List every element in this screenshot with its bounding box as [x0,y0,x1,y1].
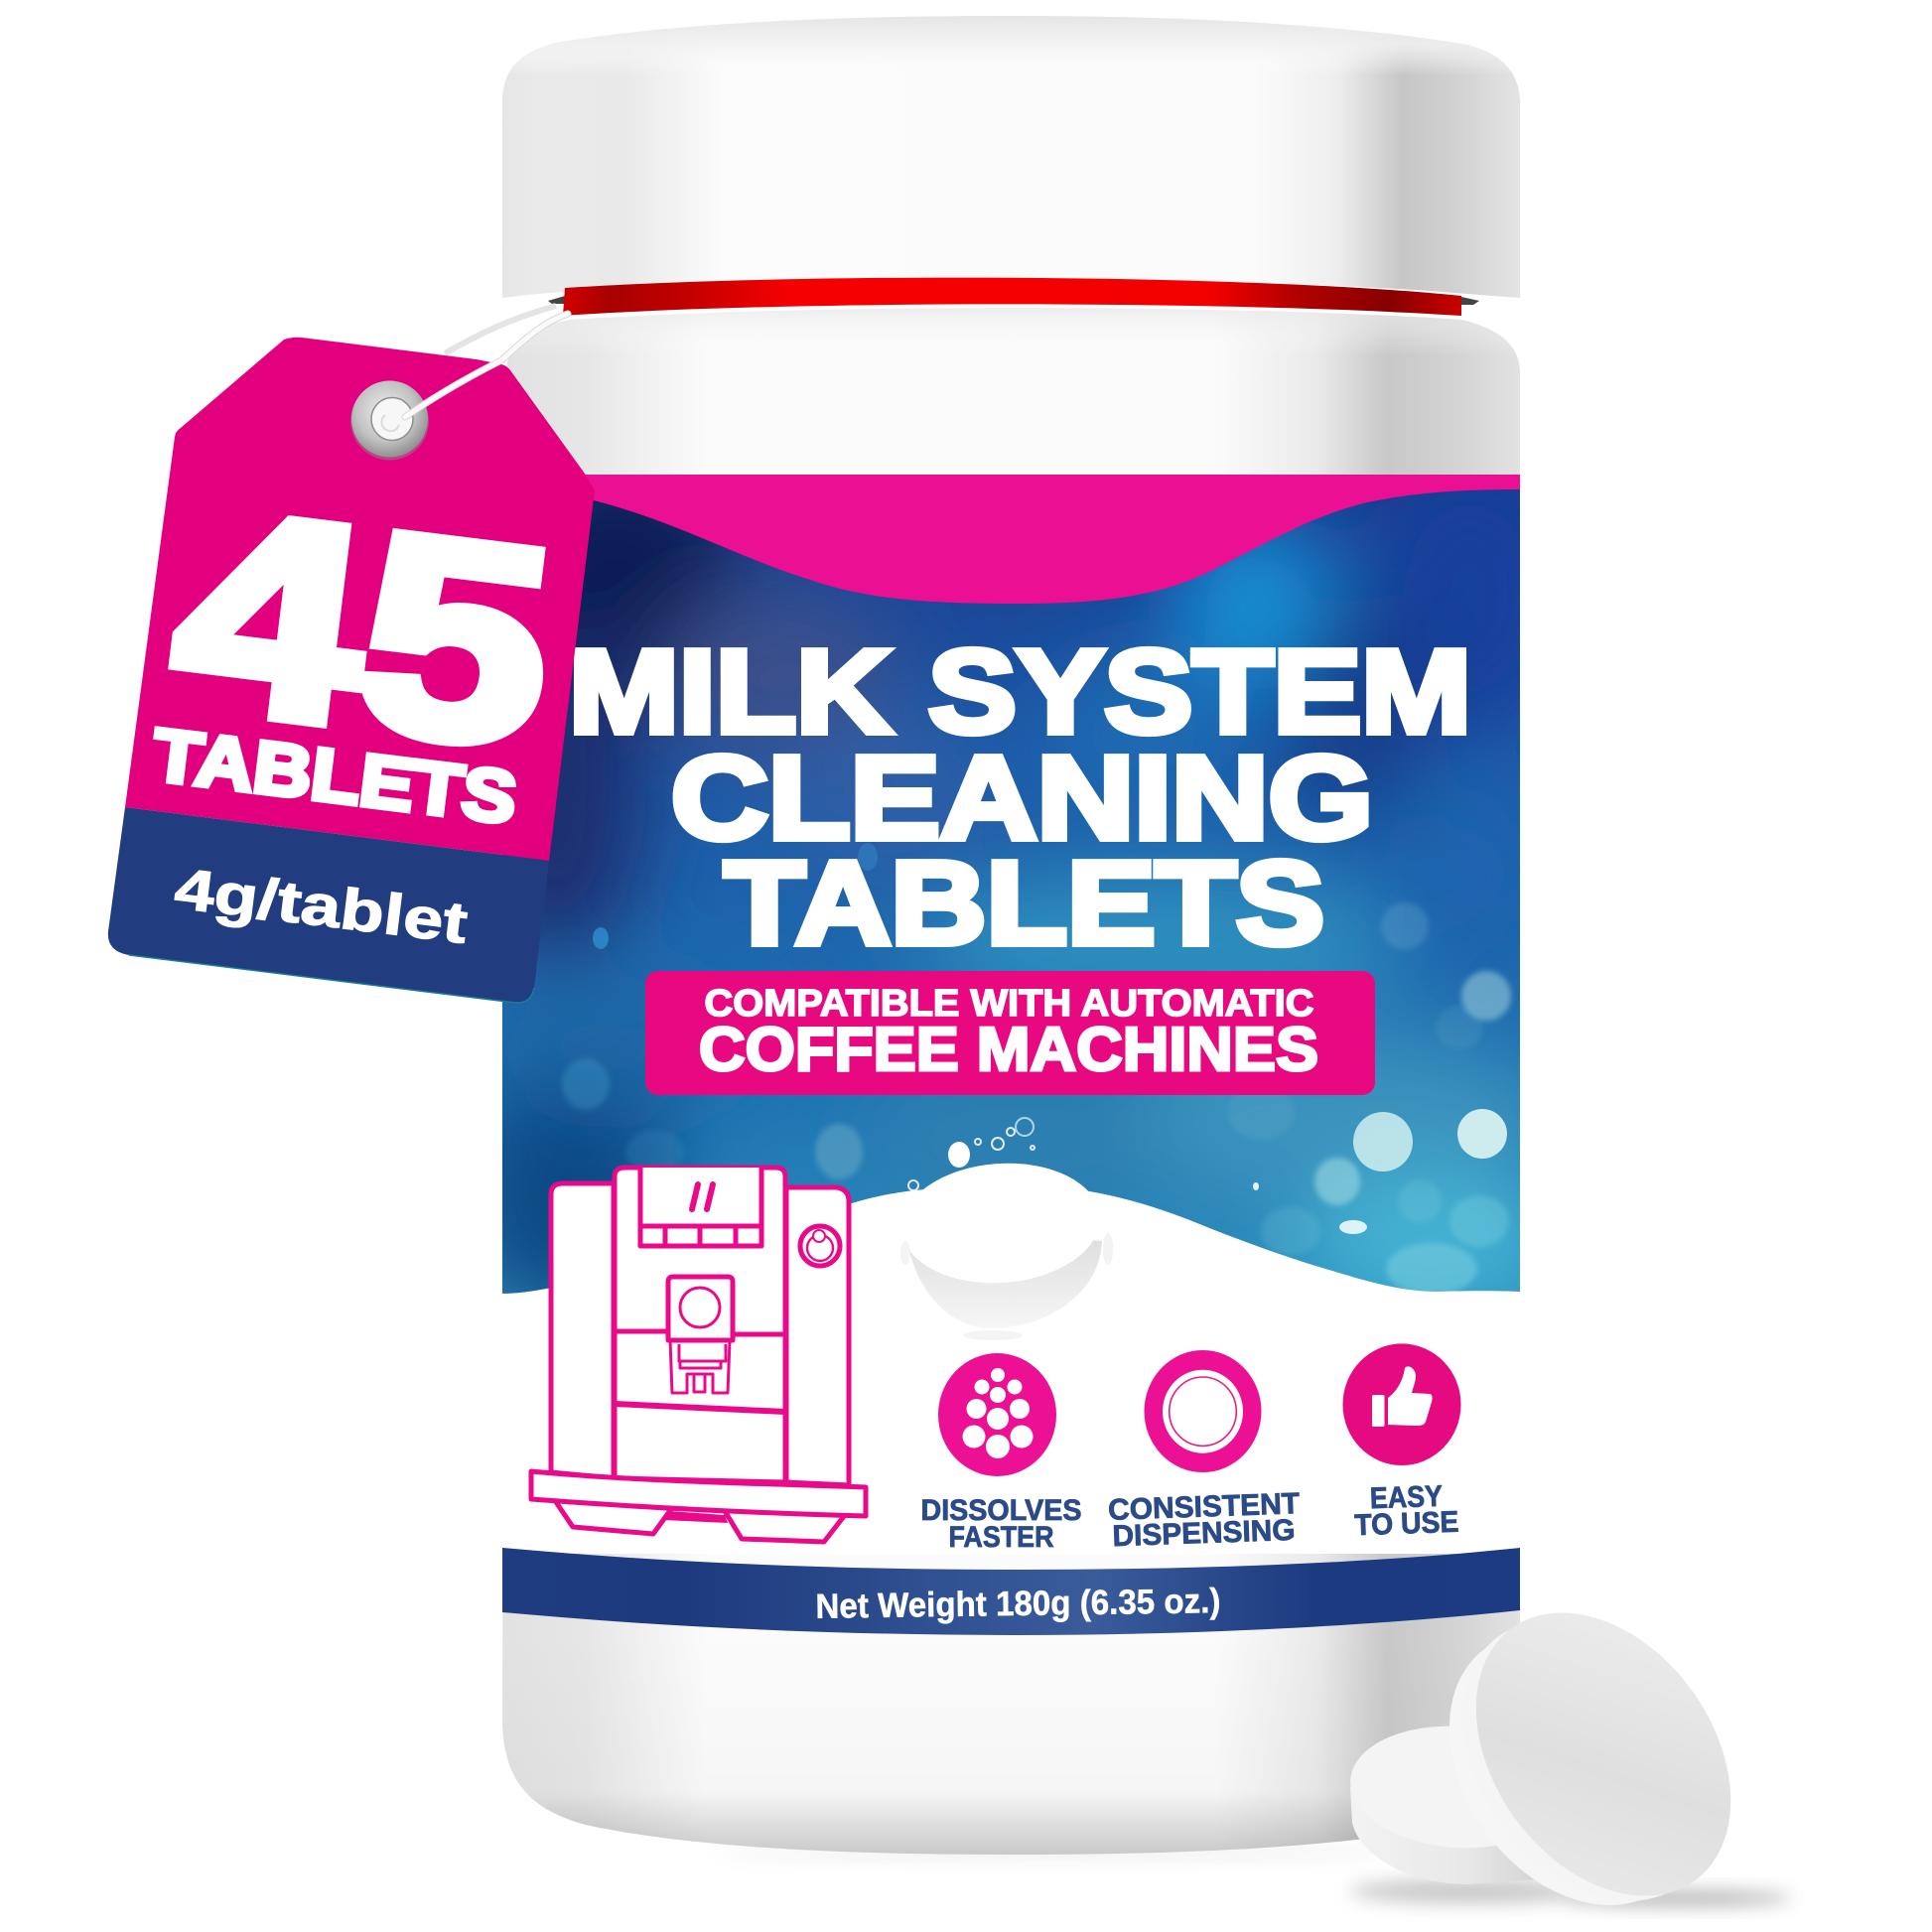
net weight text: Net Weight 180g (6.35 oz.) [815,1582,1221,1626]
benefit label: dissolves faster: FASTER [949,1521,1054,1554]
icon: easy to use thumbs up [1342,1343,1461,1465]
machine dispenser [614,1277,786,1393]
icon: dissolving tablet with bubbles [897,1118,1113,1340]
icon: coffee machine line drawing [531,1168,866,1542]
benefit label: dissolves faster [921,1494,1082,1554]
loose tablet: front tablet [1398,1564,1783,1932]
hang tag string back strand [445,306,556,353]
icon: dissolves faster [938,1353,1056,1476]
icon: consistent dispensing [1144,1350,1261,1472]
callout: compatible with automatic coffee machines: COMPATIBLE WITH AUTOMATIC [705,983,1314,1025]
loose tablets shadow [1350,1879,1792,1905]
jar ground shadow [715,1846,1390,1860]
hang tag [108,314,595,1003]
callout: compatible with automatic coffee machines: COFFEE MACHINES [699,1016,1318,1084]
machine drip tray [531,1471,866,1516]
benefit label: consistent dispensing [1108,1487,1302,1553]
machine feet [554,1499,845,1542]
tag number 45: 45 [160,450,567,806]
tag weight per tablet: 4g/tablet [172,856,471,956]
label white lower area [502,1184,1520,1554]
benefit label: consistent dispensing: DISPENSING [1112,1514,1296,1553]
jar lid [496,14,1529,298]
benefit label: consistent dispensing: CONSISTENT [1108,1487,1301,1527]
benefit label: easy to use [1353,1479,1459,1542]
neck shadow slits [548,296,1479,305]
bokeh spots [562,843,1511,1295]
tag navy footer [108,807,549,1003]
benefit label: dissolves faster: DISSOLVES [921,1494,1082,1527]
jar body [502,304,1525,1855]
benefit label: easy to use: EASY [1369,1480,1443,1515]
red tamper seal band [563,278,1461,316]
callout: compatible with automatic coffee machines [645,971,1375,1095]
title: milk system cleaning tablets [569,625,1471,969]
tag string front strand [405,314,568,417]
loose tablet: back tablet [1346,1720,1588,1884]
tag word tablets: TABLETS [148,713,521,839]
title: milk system cleaning tablets: MILK SYSTEM [569,625,1471,759]
label pink top wave [502,475,1520,604]
jar label [457,457,1559,1635]
machine display panel [640,1168,761,1246]
label blue bokeh background [502,489,1520,1294]
machine knob [800,1226,840,1266]
title: milk system cleaning tablets: TABLETS [725,838,1324,969]
title: milk system cleaning tablets: CLEANING [671,733,1373,864]
tag pink body [125,338,595,861]
benefit label: easy to use: TO USE [1354,1506,1459,1542]
label navy net-weight band [502,1548,1520,1635]
tag metal eyelet [350,381,429,461]
